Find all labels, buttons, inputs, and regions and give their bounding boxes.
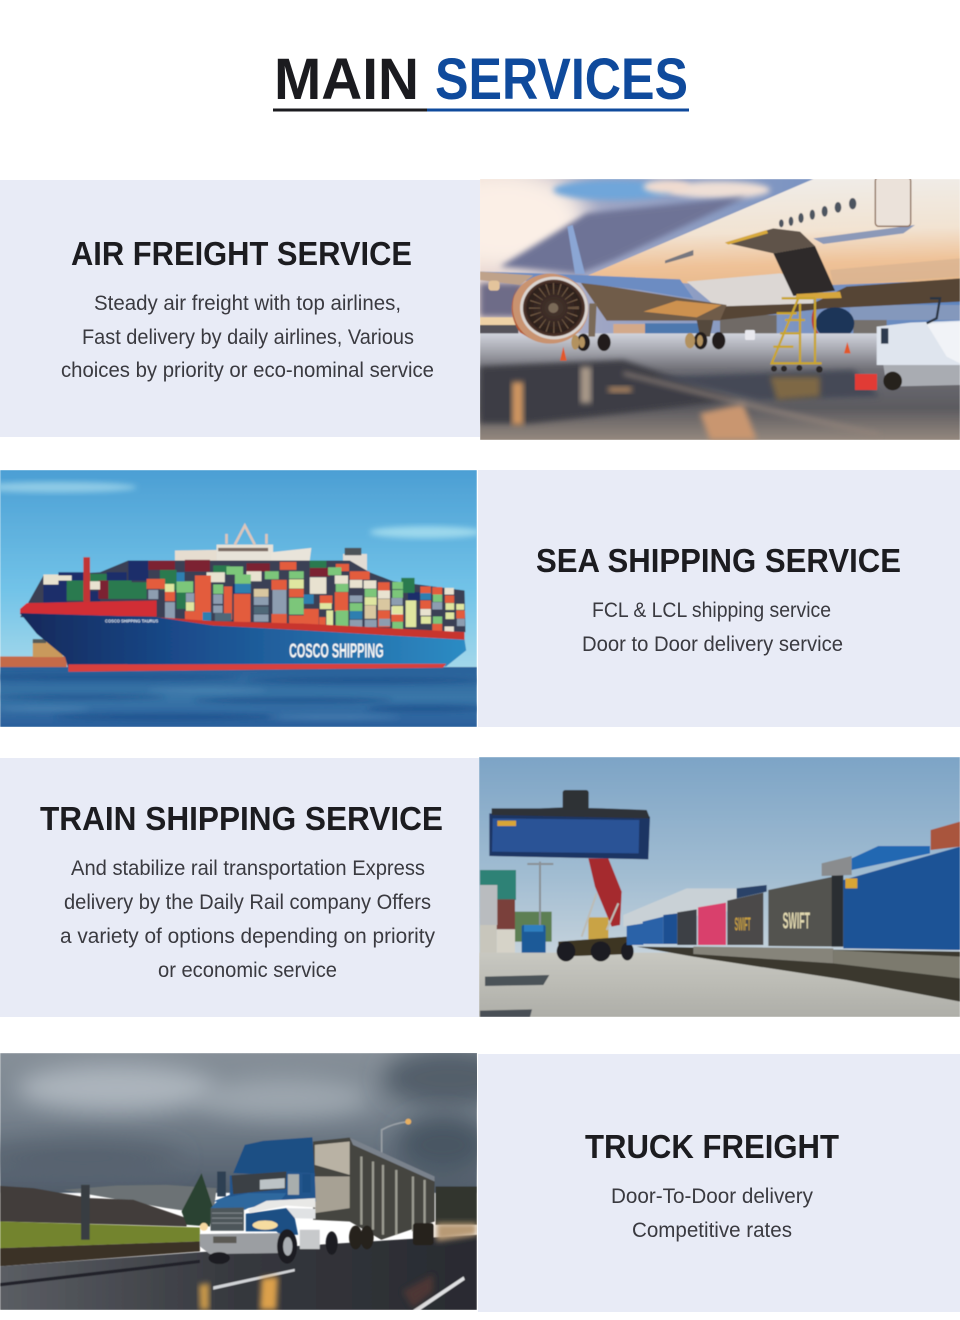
heading: train shipping: TRAIN SHIPPING SERVICE <box>40 800 443 837</box>
text: train shipping description <box>60 857 435 982</box>
hills and embankment <box>0 1173 477 1226</box>
text: air freight description: choices by priority or eco-nominal service <box>61 359 434 382</box>
text: train shipping description: delivery by the Daily Rail company Offers <box>64 891 431 914</box>
tree line <box>480 305 960 336</box>
ground <box>480 333 960 440</box>
ship name: COSCO SHIPPING <box>289 641 384 663</box>
text: train shipping description: And stabilize rail transportation Express <box>71 857 425 880</box>
blue truck <box>522 925 546 957</box>
landing gear <box>571 303 725 351</box>
heading: air freight: AIR FREIGHT SERVICE <box>71 235 412 272</box>
rail cars <box>637 947 960 1002</box>
text: sea shipping description: FCL & LCL shipping service <box>592 599 831 622</box>
grass <box>0 1221 200 1248</box>
text: truck freight description: Door-To-Door delivery <box>611 1185 813 1208</box>
title: MAIN <box>274 47 419 112</box>
panel: air freight service <box>0 180 480 437</box>
sea <box>0 667 477 727</box>
photo: container train and reach stacker: SWIFT <box>783 907 810 933</box>
panel: truck freight <box>478 1054 960 1312</box>
cargo door <box>725 228 815 253</box>
text: air freight description <box>61 292 434 382</box>
title: SERVICES <box>435 47 688 112</box>
traffic cones <box>560 342 851 361</box>
ground <box>479 953 960 1017</box>
container lettering <box>735 907 810 935</box>
trailer <box>313 1138 435 1249</box>
red rail <box>157 617 465 640</box>
main engine <box>512 274 588 344</box>
photo: cargo airplane on wet apron <box>480 179 960 440</box>
tail fin <box>567 225 585 274</box>
photo: COSCO container ship at sea: COSCO SHIPPING TAURUS <box>105 618 158 623</box>
wing <box>580 282 727 321</box>
truck cab <box>200 1137 338 1264</box>
photo: blue truck on wet road <box>0 1053 477 1310</box>
warehouse <box>623 888 737 927</box>
heading: truck freight: TRUCK FREIGHT <box>585 1128 839 1165</box>
stacker body <box>557 893 634 961</box>
light pole <box>527 862 553 925</box>
lifted container <box>489 790 650 859</box>
text: truck freight description: Competitive rates <box>632 1219 792 1242</box>
container lettering: SWIFT <box>735 915 751 935</box>
yellow stairs <box>772 298 822 363</box>
photo: container train and reach stacker <box>479 757 960 1017</box>
containers <box>43 560 465 633</box>
text: sea shipping description <box>582 599 843 656</box>
panel: train shipping service <box>0 758 479 1017</box>
text: air freight description: Steady air freight with top airlines, <box>94 292 401 315</box>
train containers <box>627 822 960 950</box>
photo: COSCO container ship at sea <box>0 470 477 727</box>
lower fuselage <box>687 273 813 310</box>
ground service vehicle <box>855 298 960 390</box>
container stack backing <box>20 561 466 632</box>
stacker arm <box>588 858 622 927</box>
heading: sea shipping: SEA SHIPPING SERVICE <box>536 542 901 579</box>
road <box>0 1235 477 1310</box>
text: truck freight description <box>611 1185 813 1242</box>
panel: sea shipping service <box>478 470 960 727</box>
red bow deck <box>20 600 157 616</box>
text: train shipping description: or economic service <box>158 959 337 982</box>
rear engine <box>812 307 854 339</box>
yard stacks <box>480 870 552 959</box>
text: sea shipping description: Door to Door delivery service <box>582 633 843 656</box>
text: air freight description: Fast delivery by daily airlines, Various <box>82 326 414 349</box>
text: train shipping description: a variety of options depending on priority <box>60 925 435 948</box>
title <box>273 47 689 112</box>
red foremast <box>83 557 90 610</box>
bridge superstructure <box>175 526 367 571</box>
airplane fuselage <box>587 179 960 285</box>
shore buildings <box>0 639 67 668</box>
hull <box>20 613 466 669</box>
street lamp <box>382 1119 411 1153</box>
